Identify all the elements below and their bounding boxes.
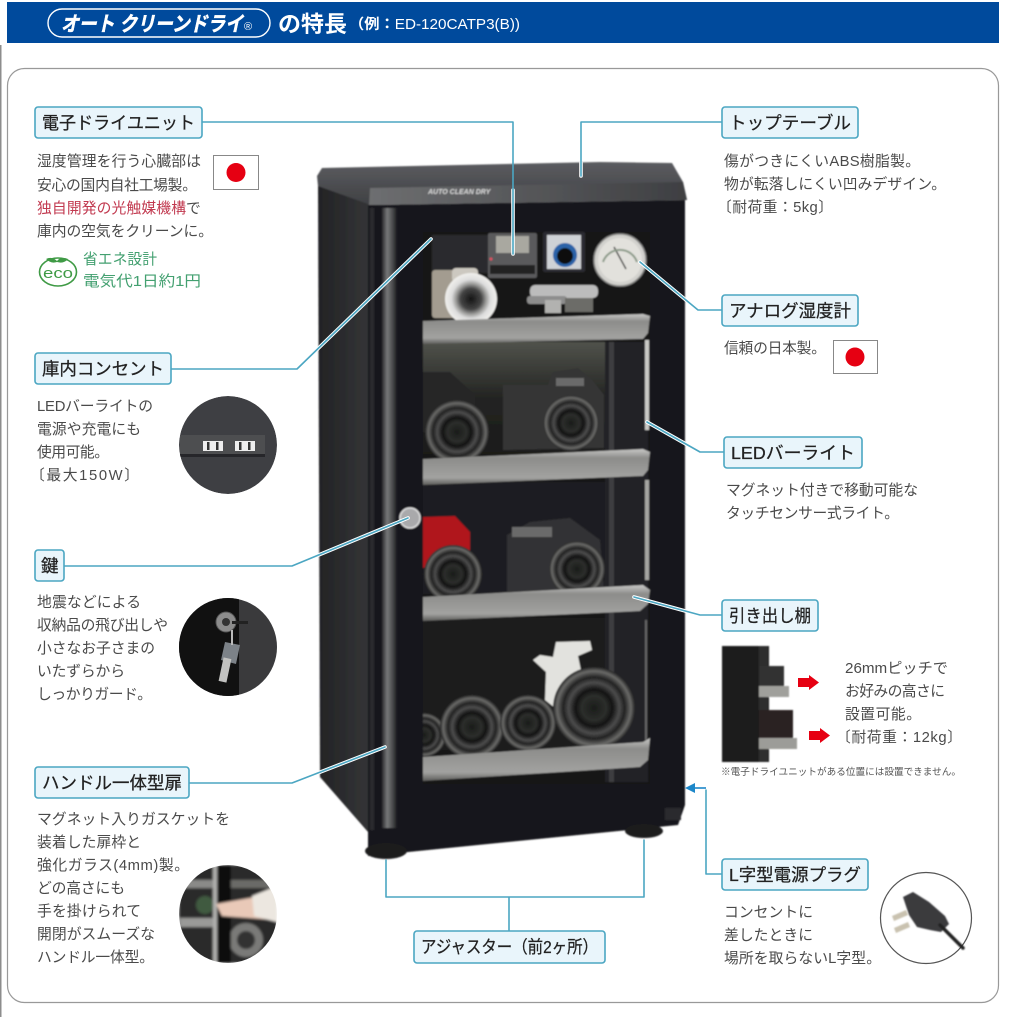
drying unit bbox=[488, 233, 537, 278]
description: 手を掛けられて bbox=[37, 903, 141, 920]
description: コンセントに bbox=[724, 905, 813, 921]
icon: door handle photo bbox=[179, 865, 277, 963]
top table bbox=[317, 162, 687, 205]
header banner bbox=[7, 2, 999, 43]
description bbox=[717, 153, 946, 216]
panel: internal outlet bbox=[30, 353, 277, 494]
brand logo: AUTO CLEAN DRY bbox=[427, 189, 492, 196]
icon: japan flag bbox=[214, 156, 258, 190]
shelf 4 bbox=[423, 738, 650, 781]
description bbox=[726, 482, 918, 522]
label bbox=[35, 107, 202, 138]
door key knob bbox=[400, 508, 420, 528]
description: 信頼の日本製。 bbox=[724, 340, 826, 357]
description: 〔耐荷重：5kg〕 bbox=[717, 199, 833, 216]
description: 湿度管理を行う心臓部は bbox=[37, 152, 201, 170]
label: 鍵 bbox=[41, 556, 59, 576]
label bbox=[35, 353, 171, 384]
label bbox=[722, 107, 858, 138]
door handle strip bbox=[382, 208, 397, 828]
power socket detail bbox=[665, 808, 681, 820]
description: しっかりガード。 bbox=[37, 686, 152, 703]
description: 傷がつきにくいABS樹脂製。 bbox=[724, 153, 920, 170]
panel: electronic dry unit bbox=[35, 107, 258, 290]
energy saving note: 電気代1日約1円 bbox=[83, 273, 201, 290]
icon: key photo bbox=[179, 598, 277, 696]
humidity dial bbox=[543, 232, 585, 272]
cabinet front bbox=[368, 200, 685, 856]
label: L字型電源プラグ bbox=[729, 865, 861, 885]
description: 開閉がスムーズな bbox=[37, 926, 155, 943]
panel: top table bbox=[717, 107, 946, 216]
product cabinet photo bbox=[317, 162, 687, 859]
label bbox=[724, 437, 862, 468]
label: ハンドル一体型扉 bbox=[42, 773, 182, 793]
cabinet side bbox=[318, 180, 368, 832]
label: 庫内コンセント bbox=[42, 359, 164, 379]
description bbox=[37, 594, 168, 703]
panel: handle door bbox=[35, 767, 277, 966]
leader lines bbox=[64, 122, 724, 931]
panel: adjuster bbox=[414, 931, 605, 963]
description: どの高さにも bbox=[37, 880, 125, 897]
glass interior bbox=[423, 232, 650, 784]
description: 独自開発の光触媒機構 bbox=[37, 200, 186, 217]
shelf 2 bbox=[423, 449, 650, 485]
description: 物が転落しにくい凹みデザイン。 bbox=[724, 175, 946, 193]
icon: japan flag bbox=[834, 340, 878, 374]
cameras row three bbox=[423, 516, 605, 603]
icon: eco: eco bbox=[43, 266, 73, 282]
description: 26mmピッチで bbox=[845, 660, 948, 677]
description: 安心の国内自社工場製。 bbox=[37, 177, 197, 194]
label bbox=[35, 767, 189, 798]
description: いたずらから bbox=[37, 663, 125, 680]
description: ハンドル一体型。 bbox=[37, 949, 154, 966]
description: 〔耐荷重：12kg〕 bbox=[836, 729, 962, 746]
lenses row four bbox=[402, 641, 635, 759]
label bbox=[722, 295, 858, 326]
description bbox=[836, 660, 962, 746]
heading: の特長 bbox=[278, 12, 347, 37]
panel: analog hygrometer bbox=[722, 295, 878, 374]
arrow: red bbox=[798, 675, 819, 690]
silver camera bbox=[432, 268, 497, 325]
panel: pull-out shelf bbox=[721, 600, 962, 778]
description: 収納品の飛び出しや bbox=[37, 617, 168, 634]
panel: LED bar light bbox=[724, 437, 918, 522]
panel: adjuster: アジャスター（前2ヶ所） bbox=[421, 937, 598, 957]
label: トップテーブル bbox=[729, 113, 851, 133]
description: で bbox=[186, 201, 201, 217]
description: マグネット入りガスケットを bbox=[37, 811, 230, 828]
description: LEDバーライトの bbox=[37, 399, 153, 415]
model example: （例：ED-120CATP3(B)) bbox=[349, 16, 520, 33]
description bbox=[30, 399, 153, 484]
label: 電子ドライユニット bbox=[42, 113, 195, 133]
energy saving note bbox=[83, 251, 201, 290]
description bbox=[37, 152, 213, 240]
description: お好みの高さに bbox=[845, 683, 945, 700]
description: 使用可能。 bbox=[37, 444, 109, 461]
arrow: red bbox=[809, 728, 830, 743]
description: 電源や充電にも bbox=[37, 421, 141, 438]
shelf photo bbox=[722, 646, 797, 762]
product name pill: オート クリーンドライ bbox=[61, 13, 244, 36]
description: 場所を取らないL字型。 bbox=[724, 950, 881, 967]
black cameras row two bbox=[423, 368, 604, 464]
description: タッチセンサー式ライト。 bbox=[726, 505, 899, 522]
energy saving note: 省エネ設計 bbox=[83, 251, 157, 268]
label: LEDバーライト bbox=[731, 443, 855, 463]
description: 小さなお子さまの bbox=[37, 640, 155, 657]
description: 強化ガラス(4mm)製。 bbox=[37, 857, 189, 874]
drone bbox=[527, 285, 598, 313]
label bbox=[722, 859, 868, 890]
description: 〔最大150W〕 bbox=[30, 467, 139, 484]
arrow to power socket bbox=[685, 783, 695, 793]
description: 庫内の空気をクリーンに。 bbox=[37, 223, 213, 240]
icon: outlet photo bbox=[179, 396, 277, 494]
product name pill: ® bbox=[244, 21, 252, 33]
description bbox=[724, 905, 881, 967]
description: マグネット付きで移動可能な bbox=[726, 482, 918, 499]
panel: L-shaped plug bbox=[722, 859, 972, 967]
shelf 1 bbox=[423, 314, 650, 344]
description bbox=[37, 811, 230, 966]
description: 設置可能。 bbox=[845, 706, 921, 723]
adjuster feet bbox=[365, 824, 663, 859]
label bbox=[35, 550, 64, 581]
description: 装着した扉枠と bbox=[37, 834, 141, 851]
label: 引き出し棚 bbox=[729, 606, 811, 626]
icon: eco bbox=[40, 258, 76, 286]
footnote: ※電子ドライユニットがある位置には設置できません。 bbox=[721, 765, 961, 778]
description: 差したときに bbox=[724, 927, 813, 944]
panel: key bbox=[35, 550, 277, 703]
description: 地震などによる bbox=[37, 594, 141, 611]
label bbox=[722, 600, 818, 631]
analog hygrometer bbox=[594, 234, 646, 286]
label: アナログ湿度計 bbox=[729, 301, 851, 321]
shelf 3 bbox=[423, 585, 650, 621]
icon: plug photo bbox=[880, 872, 972, 964]
